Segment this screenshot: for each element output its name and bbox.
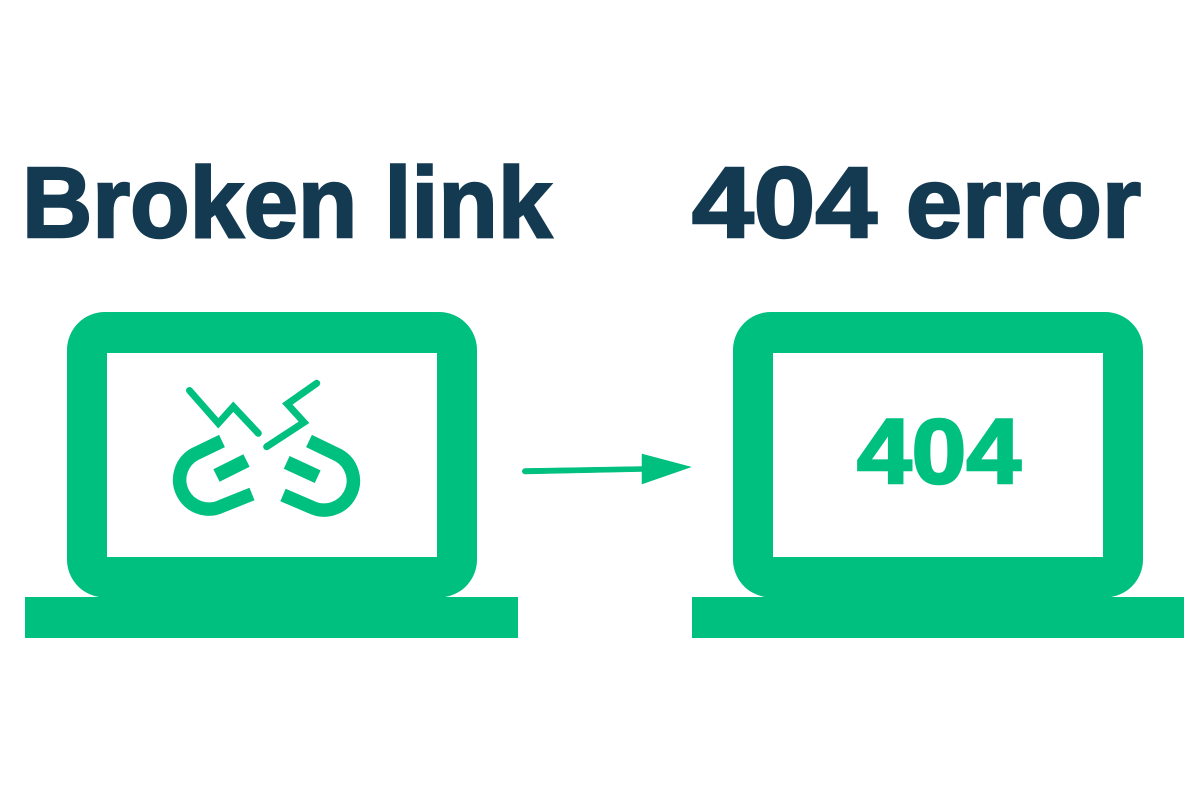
laptop: 404 error (692, 312, 1184, 638)
laptop base (25, 597, 518, 638)
icon: broken chain link (180, 383, 353, 510)
right spark (267, 383, 317, 447)
arrow (522, 454, 691, 484)
left link bar (216, 460, 246, 476)
heading: 404 error: error (906, 147, 1141, 259)
right link half (283, 441, 353, 510)
laptop base (692, 597, 1184, 638)
laptop body (67, 312, 477, 600)
heading: 404 error (692, 147, 1141, 259)
screen text: 404: 404 (857, 401, 1021, 503)
heading: Broken link: Broken link (22, 147, 552, 259)
heading: 404 error: 404 (692, 147, 877, 259)
right link bar (287, 462, 318, 477)
left link half (180, 441, 252, 509)
left spark (190, 390, 258, 433)
laptop: broken link (25, 312, 518, 638)
laptop body (733, 312, 1143, 600)
